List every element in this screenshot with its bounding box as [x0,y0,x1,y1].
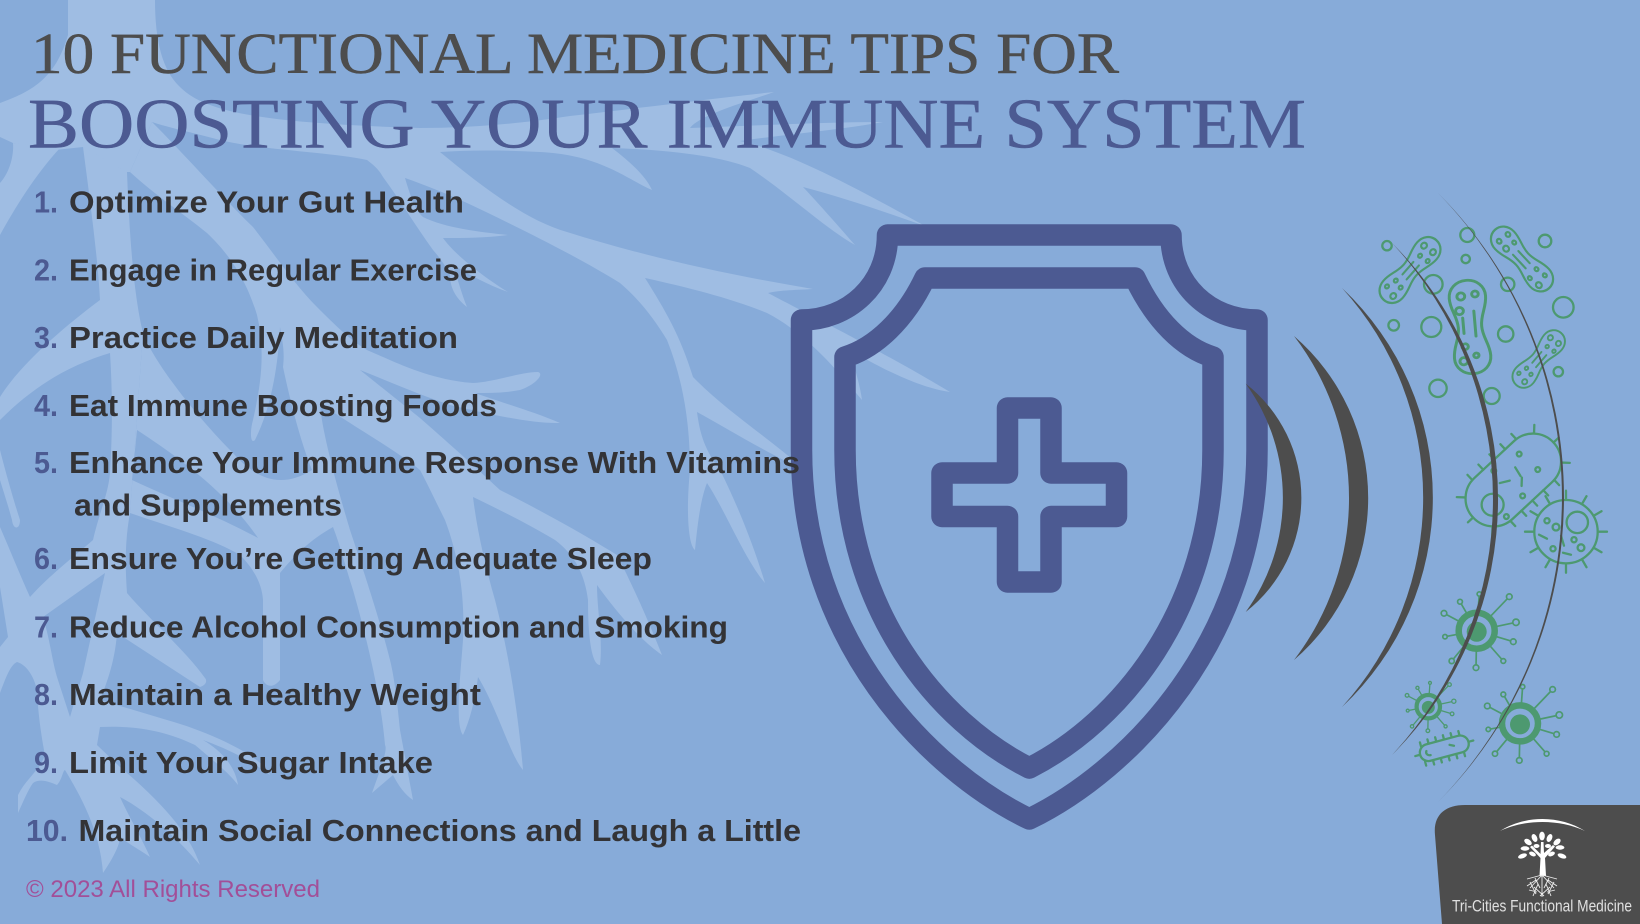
title line 1: 10 FUNCTIONAL MEDICINE TIPS FOR [31,21,1119,86]
tip 4: 4. [34,388,58,423]
microbes: peanut-shaped bacteria and spores [1374,221,1607,769]
logo badge [1435,805,1640,924]
medical cross [942,408,1116,582]
spores [1382,228,1574,404]
icon: shield with medical cross [802,235,1257,819]
logo tree [1517,832,1567,876]
tip 7: 7. [34,610,58,644]
tip 2: 2. [34,253,58,288]
tip 1: Optimize Your Gut Health [69,185,464,220]
logo arc [1500,819,1585,831]
virus cell 1 [1441,592,1519,670]
tip 5: Enhance Your Immune Response With Vitamins [69,445,800,480]
spiky capsule bacterium [1444,412,1583,548]
tip 8: 8. [34,677,58,712]
tip 9: 9. [34,745,58,780]
copyright: © 2023 All Rights Reserved [26,876,320,903]
shield inner outline [845,278,1213,768]
tip 5: 5. [34,445,58,480]
title line 2: BOOSTING YOUR IMMUNE SYSTEM [28,86,1306,164]
tip 6: Ensure You’re Getting Adequate Sleep [69,541,652,576]
tip 7: Reduce Alcohol Consumption and Smoking [69,610,728,644]
shield outer outline [802,235,1257,819]
tip 3: Practice Daily Meditation [69,320,458,355]
logo roots [1527,875,1557,897]
protective crescent waves [1246,193,1564,802]
tip 8: Maintain a Healthy Weight [69,677,481,712]
tip 4: Eat Immune Boosting Foods [69,388,497,423]
tip 1: 1. [34,185,58,220]
bacillus [1412,728,1477,769]
peanut bacterium 1 [1374,232,1446,308]
tip 10: Maintain Social Connections and Laugh a Little [78,813,801,848]
peanut bacterium 2 [1485,221,1559,297]
tip 6: 6. [34,541,58,576]
virus cell 2 [1484,684,1563,763]
peanut bacterium 4 [1508,325,1570,393]
tip 10: 10. [26,813,68,848]
spiky round cell [1525,491,1607,573]
tip 2: Engage in Regular Exercise [69,253,477,288]
tip 3: 3. [34,320,58,355]
tip 5: and Supplements [74,488,342,522]
virus cell 3 (small) [1405,681,1456,733]
tip 9: Limit Your Sugar Intake [69,745,433,780]
tip 5 [34,445,800,522]
peanut bacterium 3 [1448,279,1492,375]
background: branching vessels [0,0,950,873]
